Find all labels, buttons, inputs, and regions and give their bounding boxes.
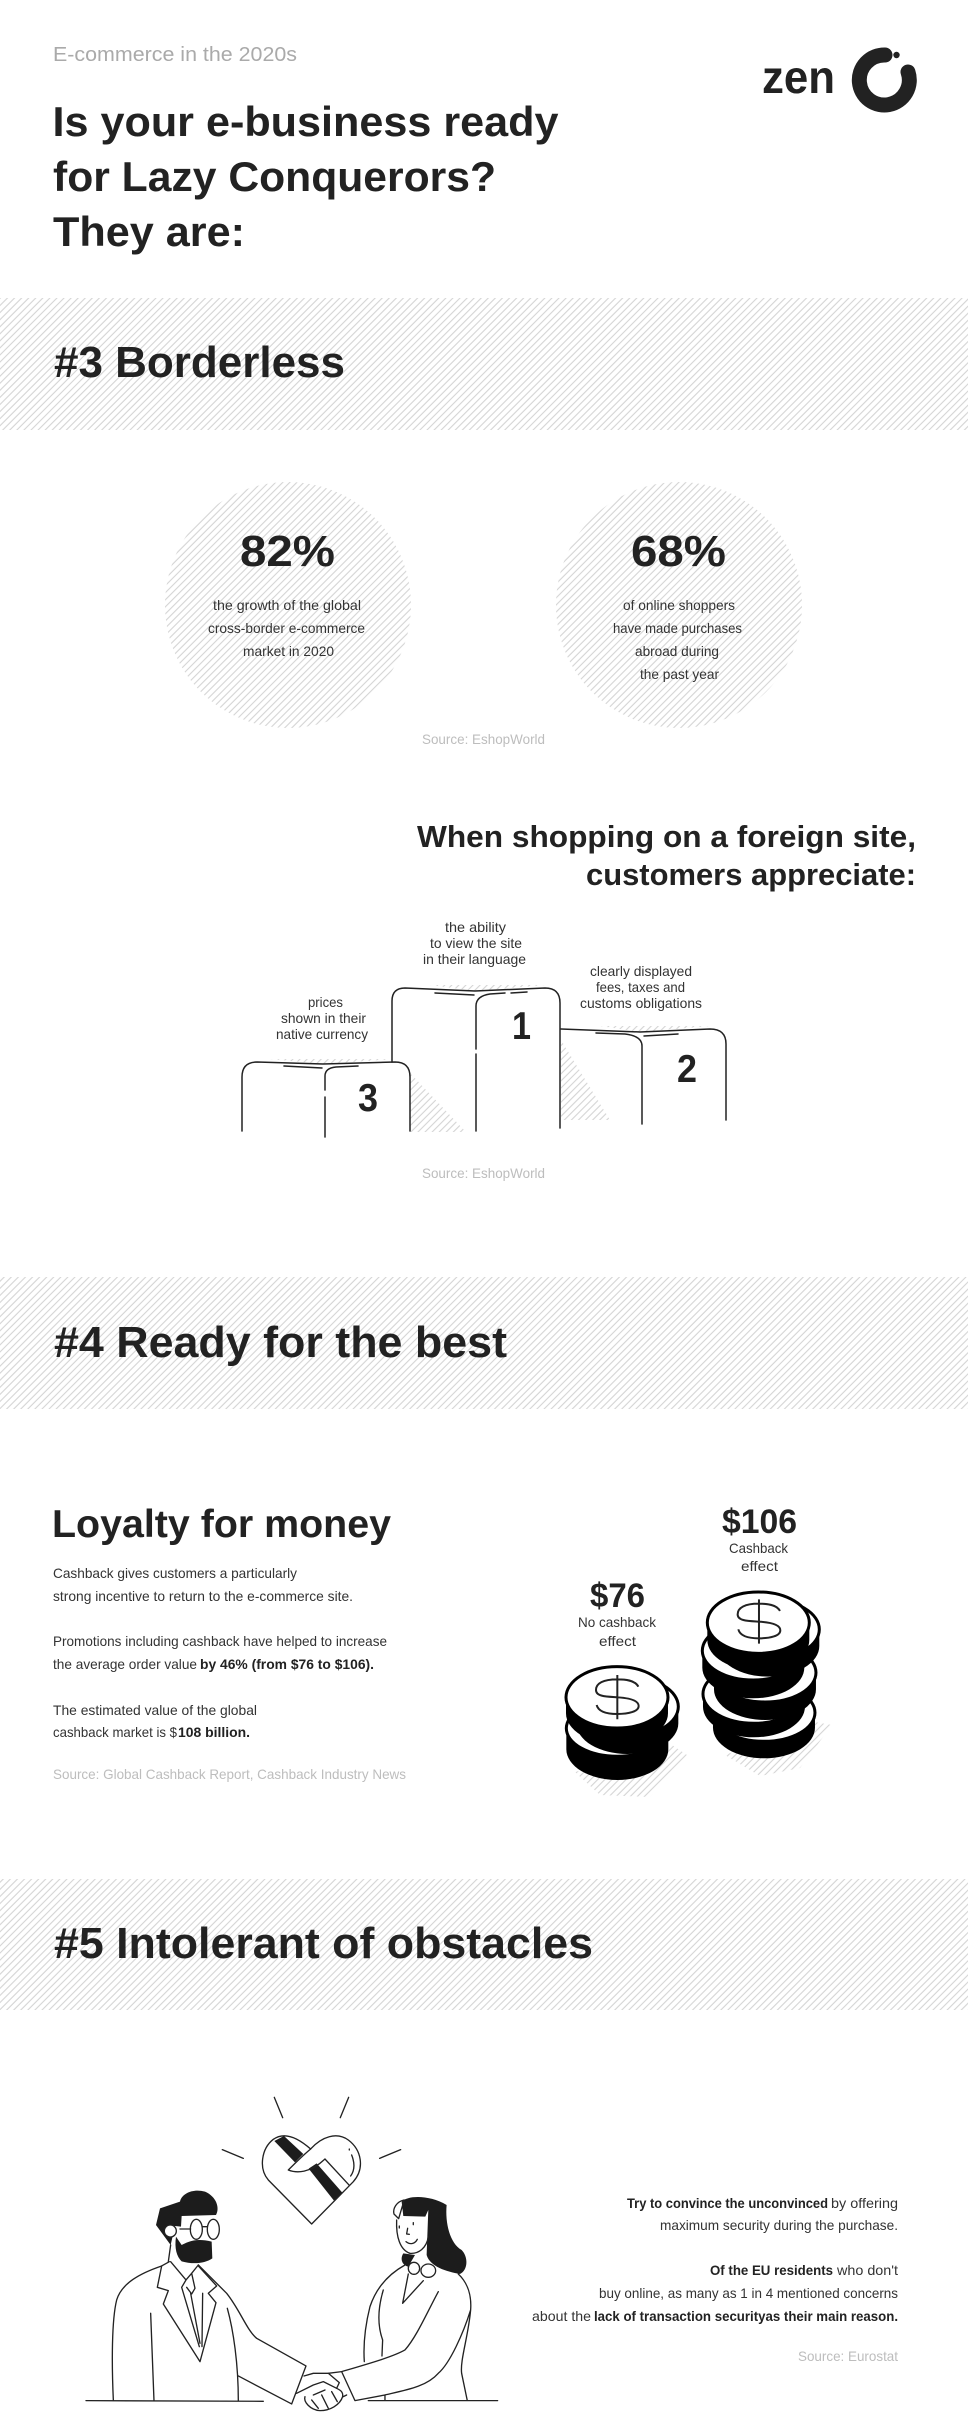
podium label 1 <box>423 919 526 967</box>
text block: security: Try to convince the unconvinced <box>627 2195 828 2211</box>
text block: security: Of the EU residents <box>710 2262 833 2278</box>
coin stack: no cashback <box>566 1667 678 1780</box>
text block: security <box>532 2195 898 2324</box>
source: circles: Source: EshopWorld <box>422 731 545 747</box>
logo: zen <box>762 51 909 105</box>
section band: #4 Ready for the best: #4 Ready for the best <box>54 1318 507 1367</box>
coin shadows <box>575 1722 832 1797</box>
stat circle: 82%: cross-border e-commerce <box>208 620 365 636</box>
source: cashback: Source: Global Cashback Report, Cashback Industry News <box>53 1766 406 1782</box>
stat circle: 68%: have made purchases <box>613 620 742 636</box>
coin value: $76: $76 <box>590 1577 645 1615</box>
section band: #5 Intolerant of obstacles: #5 Intolerant of obstacles <box>54 1919 593 1968</box>
podium 2 <box>561 1029 726 1124</box>
stat circle: 82%: the growth of the global <box>213 597 361 613</box>
coin value: $76: No cashback <box>578 1614 657 1630</box>
coin value: $76 <box>578 1577 657 1649</box>
text block: security: maximum security during the purchase. <box>660 2217 898 2233</box>
stat circle: 82% <box>165 482 411 728</box>
logo: zen: zen <box>762 51 835 103</box>
icon: heart with card stripe <box>262 2136 360 2224</box>
podium label 2: customs obligations <box>580 995 702 1011</box>
coin value: $106: effect <box>741 1558 778 1574</box>
text block: cashback: by 46% (from $76 to $106). <box>200 1656 374 1672</box>
podium label 2: clearly displayed <box>590 963 692 979</box>
podium label 3: prices <box>308 994 343 1010</box>
stat circle: 68%: abroad during <box>635 643 719 659</box>
podium label 3: native currency <box>276 1026 368 1042</box>
section band: #3 Borderless: #3 Borderless <box>54 338 345 387</box>
podium numbers: 1 <box>512 1005 531 1048</box>
title: for Lazy Conquerors? <box>53 153 496 200</box>
podium label 3 <box>276 994 368 1042</box>
podium 3 <box>242 1062 410 1137</box>
podium numbers: 2 <box>677 1048 697 1091</box>
text block: cashback: Promotions including cashback have helped to increase <box>53 1633 387 1649</box>
stat circle: 68%: 68% <box>631 527 726 576</box>
coin stack: cashback <box>702 1592 819 1758</box>
stat circle: 82%: market in 2020 <box>243 643 334 659</box>
icon: dollar sign on coin <box>596 1675 639 1719</box>
heading: when shopping on a foreign site: When shopping on a foreign site, <box>417 819 916 854</box>
stat circle: 68%: of online shoppers <box>623 597 735 613</box>
section band: #5 Intolerant of obstacles <box>0 1879 968 2010</box>
illustration: handshake <box>86 2097 498 2411</box>
text block: cashback: The estimated value of the global <box>53 1702 257 1718</box>
text block: cashback: strong incentive to return to the e-commerce site. <box>53 1588 353 1604</box>
title <box>52 98 559 255</box>
text block: cashback: Cashback gives customers a particularly <box>53 1565 297 1581</box>
podium chart <box>242 919 726 1137</box>
source: podium: Source: EshopWorld <box>422 1165 545 1181</box>
coin value: $76: effect <box>599 1633 636 1649</box>
icon: rays <box>222 2097 401 2158</box>
podium label 1: to view the site <box>430 935 522 951</box>
coin value: $106: Cashback <box>729 1540 789 1556</box>
podium label 1: in their language <box>423 951 526 967</box>
podium 1 <box>392 988 560 1131</box>
podium label 2 <box>580 963 702 1011</box>
section band: #3 Borderless <box>0 298 968 430</box>
man <box>86 2191 306 2404</box>
podium label 3: shown in their <box>281 1010 366 1026</box>
stat circle: 68%: the past year <box>640 666 719 682</box>
heading: when shopping on a foreign site <box>417 819 916 892</box>
title: They are: <box>53 208 245 255</box>
woman <box>342 2197 498 2401</box>
text block: cashback: 108 billion. <box>178 1724 250 1740</box>
stat circle: 82%: 82% <box>240 527 335 576</box>
section band: #4 Ready for the best <box>0 1277 968 1409</box>
icon: handshake hands <box>297 2372 347 2411</box>
coin value: $106: $106 <box>722 1503 797 1541</box>
text block: security: lack of transaction securityas their main reason. <box>594 2308 898 2324</box>
text block: security: by offering <box>831 2195 898 2211</box>
text block: security: buy online, as many as 1 in 4 mentioned concerns <box>599 2285 898 2301</box>
stat circle: 68% <box>556 482 802 728</box>
podium numbers: 3 <box>358 1077 378 1120</box>
source: eurostat: Source: Eurostat <box>798 2348 898 2364</box>
text block: security: about the <box>532 2308 591 2324</box>
podium numbers <box>358 1005 697 1120</box>
icon: dollar sign on top coin <box>738 1599 780 1644</box>
podium label 1: the ability <box>445 919 506 935</box>
text block: cashback: cashback market is $ <box>53 1724 177 1740</box>
text block: cashback <box>53 1565 387 1740</box>
heading: when shopping on a foreign site: customers appreciate: <box>586 857 916 892</box>
podium label 2: fees, taxes and <box>596 979 685 995</box>
title: Is your e-business ready <box>52 98 559 145</box>
eyebrow: E-commerce in the 2020s <box>53 44 297 66</box>
coin value: $106 <box>722 1503 797 1574</box>
text block: security: who don't <box>836 2262 898 2278</box>
text block: cashback: the average order value <box>53 1656 197 1672</box>
heading: loyalty for money: Loyalty for money <box>52 1503 391 1546</box>
